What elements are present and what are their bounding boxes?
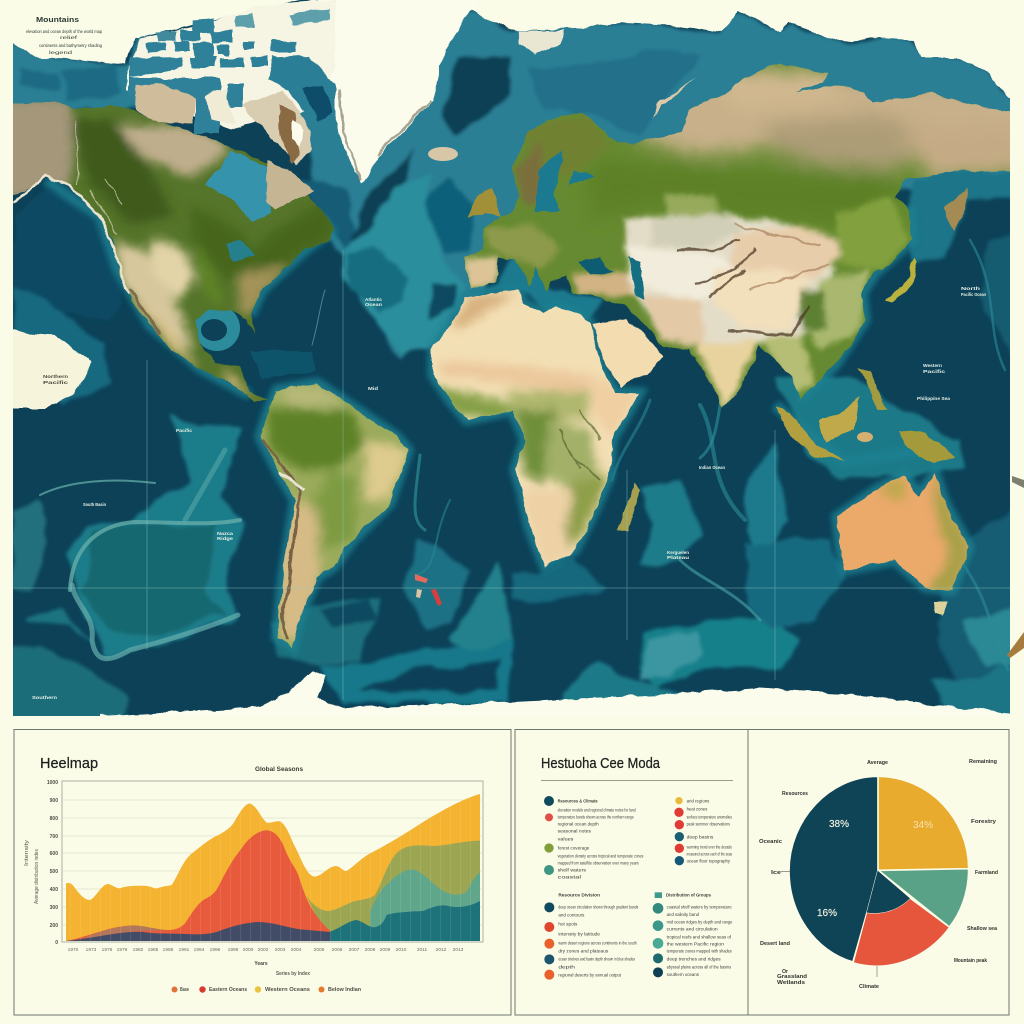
pie callout labels: Ice: [771, 870, 781, 876]
y axis labels: 300: [50, 905, 58, 911]
x axis labels: 2005: [314, 947, 325, 953]
map labels on ocean: Philippine Sea: [917, 396, 951, 401]
list text: hot spots: [558, 922, 578, 927]
right edge fragments: [1007, 476, 1024, 658]
x axis labels: 2013: [453, 947, 464, 953]
x axis labels: 2007: [349, 947, 360, 953]
pie value labels: 38%: [829, 819, 849, 830]
list text: arid regions: [687, 798, 710, 803]
Gulf of Mexico: [196, 310, 240, 351]
y axis labels: 700: [50, 834, 58, 840]
x axis labels: 1982: [133, 947, 144, 953]
graticule: [13, 250, 1010, 700]
Iceland: [428, 147, 458, 161]
legend: Base: [180, 987, 189, 993]
Tasmania: [932, 602, 948, 616]
pie callout labels: Farmland: [975, 870, 998, 876]
x axis labels: 1988: [163, 947, 174, 953]
area: dark teal: [330, 901, 480, 941]
panel: legend list: [515, 730, 748, 1015]
list dots: [544, 796, 684, 980]
map title block: elevation and ocean depth of the world map: [26, 29, 102, 34]
marker: red patches: [415, 574, 442, 606]
map labels on ocean: Ocean: [365, 302, 382, 307]
list text: ocean floor topography: [687, 858, 731, 863]
list text: Distribution of Groups: [666, 893, 711, 898]
list text: [558, 798, 733, 978]
pie callout labels: Desert land: [760, 941, 790, 947]
Arabia: [592, 318, 663, 387]
y axis labels: 500: [50, 869, 58, 875]
cream polar margin above the sea: [13, 0, 1010, 98]
list text: currents and circulation: [667, 927, 718, 932]
pie callout labels: Average: [867, 760, 888, 766]
pie callout labels: Grassland: [777, 974, 807, 980]
y axis labels: 0: [55, 940, 58, 946]
list text: shelf waters: [558, 867, 587, 872]
x axis labels: 2008: [365, 947, 376, 953]
map labels on ocean: Pacific: [923, 369, 946, 374]
pie callout labels: Oceanic: [759, 839, 782, 845]
map labels on ocean: Pacific: [176, 428, 193, 433]
legend: Western Oceans: [265, 987, 310, 993]
list text: vegetation density across tropical and temperate zones: [558, 854, 644, 859]
Quebec tan: [265, 160, 314, 208]
label on Hawaii panel: Pacific: [43, 380, 69, 385]
ocean base: [13, 0, 1010, 716]
area: yellow: [66, 794, 480, 941]
Canadian Arctic islands: [128, 0, 335, 165]
x axis labels: 1970: [68, 947, 79, 953]
label on Hawaii panel: [43, 374, 69, 385]
stacked area chart: [66, 794, 480, 941]
list text: mapped from satellite observation over many years: [558, 860, 639, 865]
list text: forest coverage: [558, 846, 590, 851]
x axis labels: 2000: [243, 947, 254, 953]
heading: heatmap: Heelmap: [40, 755, 98, 772]
list text: deep basins: [687, 835, 714, 840]
coast halos: [46, 180, 969, 647]
map title block: [26, 17, 102, 55]
Great Lakes: [226, 240, 255, 262]
y axis labels: [47, 780, 58, 946]
world map: [0, 0, 1024, 730]
x axis labels: 2010: [396, 947, 407, 953]
continent: Australia: [837, 470, 972, 595]
list text: and salinity band: [667, 912, 699, 917]
Greenland: [330, 2, 472, 184]
x axis labels: 2009: [380, 947, 391, 953]
y axis labels: 400: [50, 887, 58, 893]
pie callout labels: Remaining: [969, 759, 997, 765]
area: brown blend: [87, 925, 167, 938]
list text: ocean shelves and basin depth shown in blue shades: [558, 957, 635, 962]
map labels on ocean: Nazca: [217, 531, 234, 536]
map labels on ocean: Western: [923, 363, 942, 368]
pie chart: [789, 777, 968, 966]
x axis labels: 2012: [436, 947, 447, 953]
pie leader lines: [781, 872, 877, 977]
y axis labels: 900: [50, 798, 58, 804]
list text: surface temperature anomalies: [687, 815, 732, 820]
map title block: relief: [60, 35, 78, 40]
list text: mid ocean ridges by depth and range: [667, 920, 733, 925]
area: red: [66, 830, 330, 941]
map labels on ocean: Ridge: [217, 536, 234, 541]
list text: warming trend over the decade: [687, 845, 732, 850]
x axis labels: 2004: [291, 947, 302, 953]
map labels on ocean: South Basin: [83, 502, 106, 507]
Caspian Sea: [627, 257, 645, 300]
map labels on ocean: Kerguelen: [667, 550, 689, 555]
Okhotsk inlet: [652, 78, 695, 120]
list text: coastal shelf waters by temperature: [667, 904, 732, 909]
map labels on ocean: Pacific Ocean: [961, 292, 986, 297]
legend: Below Indian: [328, 987, 361, 993]
map labels on ocean: Plateau: [667, 555, 689, 560]
y axis labels: 1000: [47, 780, 58, 786]
x axis labels: 1994: [194, 947, 205, 953]
pie value labels: [817, 819, 933, 919]
slice: inner navy: [867, 871, 910, 913]
slice: red: [853, 898, 949, 966]
chart frame and gridlines: [62, 781, 483, 942]
Japan: [885, 258, 917, 302]
list text: coastal: [558, 874, 581, 879]
Kamchatka: [945, 186, 968, 233]
pie callout labels: Mountain peak: [954, 958, 987, 964]
x axis labels: 2003: [275, 947, 286, 953]
slice: yellow: [878, 777, 968, 870]
x axis labels: 2011: [417, 947, 427, 953]
list text: deep trenches and ridges: [667, 957, 721, 962]
Greenland east coast ridges: [338, 90, 430, 180]
slice: navy: [789, 777, 878, 962]
y axis labels: 800: [50, 816, 58, 822]
map labels on ocean: [32, 286, 986, 700]
pie callout labels: Shallow sea: [967, 926, 997, 932]
pie callout labels: Wetlands: [777, 980, 805, 986]
pie callout labels: Forestry: [971, 819, 996, 825]
pale sea streaks: [40, 240, 1008, 670]
vertical sheen lines: [71, 797, 471, 941]
x axis labels: 2002: [258, 947, 269, 953]
y axis labels: 200: [50, 923, 58, 929]
list text: heat zones: [687, 807, 708, 812]
list text: regional ocean depth: [558, 822, 599, 827]
Baltic Sea: [535, 150, 563, 212]
list text: warm desert regions across continents in the south: [558, 940, 637, 945]
Antarctica: [100, 671, 1010, 716]
list text: deep ocean circulation shown through gradient bands: [558, 904, 639, 909]
map title block: Mountains: [36, 17, 79, 24]
list text: temperature bands shown across the northern range: [558, 815, 634, 820]
x axis labels: 1979: [117, 947, 128, 953]
area: olive: [302, 841, 480, 941]
map labels on ocean: Southern: [32, 695, 57, 700]
map labels on ocean: Indian Ocean: [699, 465, 725, 470]
area: light teal: [370, 869, 480, 941]
y axis title: Intensity: [24, 839, 30, 866]
pie value labels: 34%: [913, 820, 933, 831]
continent: North America: [0, 95, 335, 405]
list text: values: [558, 837, 574, 842]
legend: Eastern Oceans: [209, 987, 247, 993]
list text: regional deserts by annual output: [558, 973, 622, 978]
panel: heatmap: [14, 730, 511, 1015]
Sulawesi: [857, 432, 873, 442]
x axis labels: 1991: [179, 947, 190, 953]
y axis title: Average distribution index: [34, 849, 40, 904]
y axis labels: 600: [50, 851, 58, 857]
Hawaii cream panel: [0, 330, 90, 408]
x axis labels: [68, 947, 464, 953]
list text: depth: [558, 964, 576, 969]
panel: pie chart: [748, 730, 1009, 1015]
pie callout labels: Climate: [859, 984, 879, 990]
list text: temperate zones mapped with shades: [667, 949, 732, 954]
x axis labels: 2006: [332, 947, 343, 953]
Caribbean: [250, 350, 315, 378]
x axis labels: 1973: [86, 947, 97, 953]
list text: peak summer observations: [687, 822, 731, 827]
New Guinea: [899, 430, 955, 463]
continent: Eurasia: [465, 60, 1024, 410]
map labels on ocean: Mid: [368, 386, 378, 391]
list text: and contours: [558, 912, 585, 917]
x axis labels: 1976: [102, 947, 113, 953]
list text: Resource Division: [558, 893, 600, 898]
Hudson Bay: [206, 150, 270, 222]
x axis subtitle: Series by Index: [276, 971, 310, 977]
legend: [172, 986, 361, 993]
pie value labels: 16%: [817, 908, 837, 919]
map labels on ocean: Atlantic: [365, 297, 382, 302]
Britain: [467, 187, 500, 218]
Sumatra and Java: [775, 407, 845, 460]
map labels on ocean: North: [961, 286, 980, 291]
chart title: Global Seasons: [255, 767, 304, 773]
ocean currents and depth zones: [0, 10, 1024, 730]
map title block: continents and bathymetry shading: [39, 43, 102, 48]
list text: elevation models and regional climate notes for land: [558, 808, 636, 813]
list text: tropical reefs and shallow seas of: [667, 934, 732, 939]
list text: dry zones and plateaus: [558, 948, 609, 953]
pie callout labels: [759, 759, 998, 990]
x axis labels: 1998: [228, 947, 239, 953]
Philippines: [859, 367, 887, 410]
pie callout labels: Resources: [782, 791, 808, 797]
area: navy: [66, 922, 330, 941]
list text: seasonal notes: [558, 829, 592, 834]
x axis title: Years: [254, 961, 268, 967]
x axis labels: 1985: [148, 947, 159, 953]
continent: Africa: [430, 290, 640, 570]
Borneo: [819, 397, 859, 441]
label on Hawaii panel: Northern: [43, 374, 68, 379]
x axis labels: 1996: [210, 947, 221, 953]
pie callout labels: Or: [782, 969, 788, 975]
continent: South America: [260, 383, 410, 647]
Madagascar: [618, 482, 640, 532]
list text: measured across each of the seas: [687, 851, 732, 856]
list text: abyssal plains across all of the basins: [667, 965, 732, 970]
Black Sea: [577, 258, 613, 275]
heading rule: [541, 780, 733, 781]
Svalbard: [518, 30, 565, 55]
list text: Resources & Climate: [558, 798, 598, 803]
heading: legend list: Hestuoha Cee Moda: [541, 756, 661, 772]
list text: the western Pacific region: [667, 942, 724, 947]
list text: intensity by latitude: [558, 932, 600, 937]
y axis title: [24, 839, 40, 904]
list text: southern oceans: [667, 972, 700, 977]
slice: green: [879, 869, 968, 927]
map title block: legend: [49, 50, 73, 55]
